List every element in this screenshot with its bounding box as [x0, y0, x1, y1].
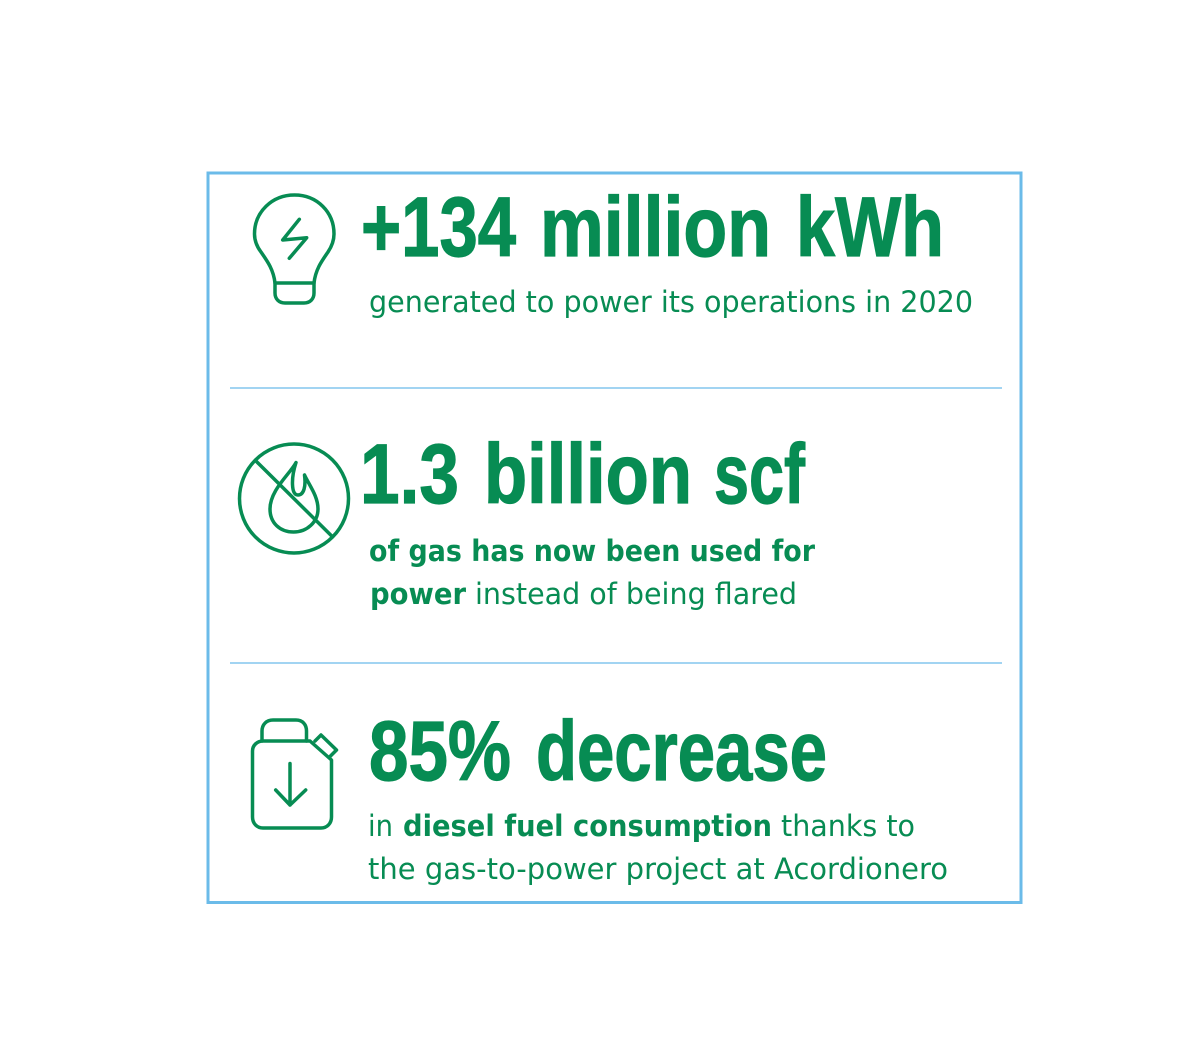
heading: 85% decrease: decrease	[536, 704, 827, 798]
panel: electricity generated	[254, 180, 973, 319]
heading: 1.3 billion scf: 1.3	[360, 427, 459, 521]
text: diesel consumption: in	[368, 809, 393, 843]
text: diesel consumption: the gas-to-power project at Acordionero	[368, 852, 948, 886]
text: gas used for power	[369, 534, 816, 611]
heading: 85% decrease	[369, 704, 827, 798]
text: diesel consumption: thanks to	[781, 809, 915, 843]
text: gas used for power: instead of being flared	[475, 577, 797, 611]
panel: diesel decrease	[252, 704, 948, 886]
heading: 1.3 billion scf	[360, 427, 806, 521]
heading: 85% decrease: 85%	[369, 704, 511, 798]
text: gas used for power: of gas has now been used for	[369, 534, 816, 568]
heading: +134 million kWh	[361, 180, 944, 274]
heading: +134 million kWh: million	[540, 180, 771, 274]
heading: +134 million kWh: kWh	[796, 180, 944, 274]
heading: +134 million kWh: +134	[361, 180, 516, 274]
panel: gas not flared	[240, 427, 816, 611]
heading: 1.3 billion scf: billion	[484, 427, 692, 521]
text: diesel consumption	[368, 809, 948, 886]
icon: crossed-out flame	[240, 444, 348, 553]
panel: outer frame	[208, 173, 1021, 902]
heading: 1.3 billion scf: scf	[714, 427, 806, 521]
icon: light bulb	[254, 195, 334, 303]
icon: fuel can with down arrow	[252, 720, 336, 828]
text: generated power: generated to power its operations in 2020	[369, 285, 973, 319]
text: gas used for power: power	[370, 577, 467, 611]
text: diesel consumption: diesel fuel consumption	[403, 809, 772, 843]
